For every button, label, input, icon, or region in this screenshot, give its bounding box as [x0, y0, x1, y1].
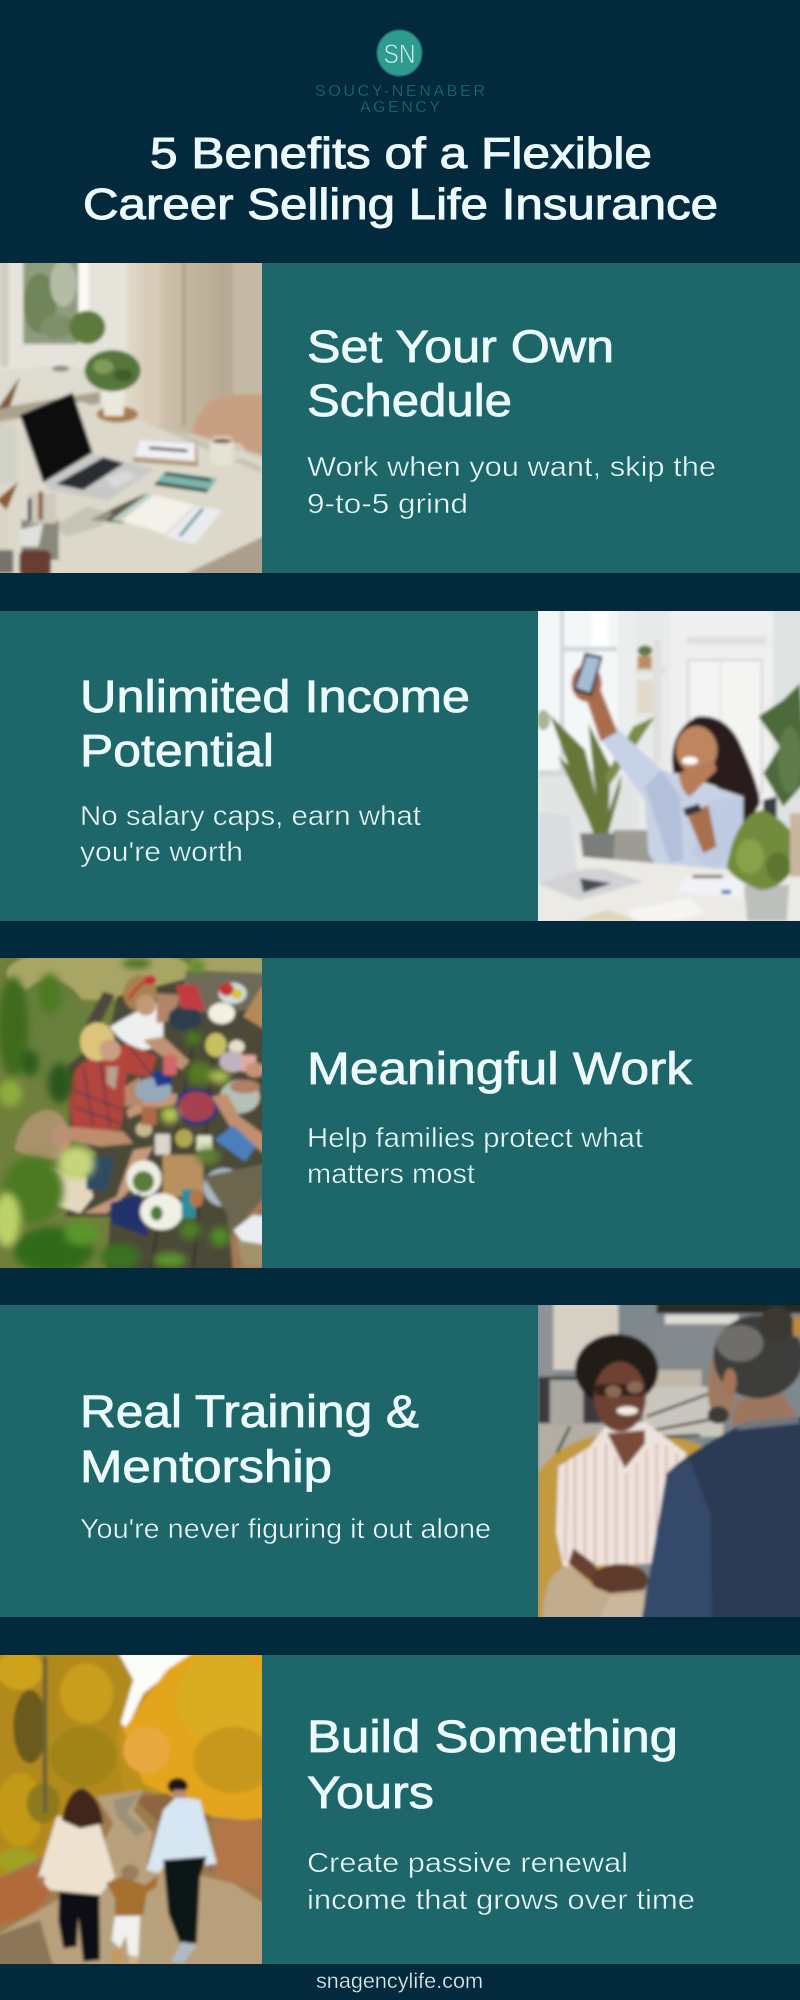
description: 9-to-5 grind: [307, 488, 468, 519]
heading: Real Training &: [80, 1386, 419, 1437]
logo: SN circle: SN: [384, 39, 416, 69]
photo: mentor conversation: [538, 1305, 800, 1617]
logo: SN circle: [377, 30, 422, 76]
heading: [80, 1386, 419, 1492]
header: [83, 30, 718, 229]
description: Create passive renewal: [307, 1847, 628, 1878]
title: 5 Benefits of a Flexible: [150, 129, 652, 178]
photo: family picnic from above: [0, 958, 262, 1268]
heading: [307, 321, 614, 426]
heading: Mentorship: [80, 1441, 332, 1492]
heading: Schedule: [307, 375, 512, 426]
description: No salary caps, earn what: [80, 800, 421, 831]
agency name: AGENCY: [360, 99, 440, 116]
heading: Unlimited Income: [80, 671, 470, 722]
heading: [80, 671, 470, 776]
footer website: snagencylife.com: [316, 1970, 483, 1993]
heading: Set Your Own: [307, 321, 614, 372]
description: [80, 800, 421, 867]
description: You're never figuring it out alone: [80, 1513, 491, 1544]
heading: Potential: [80, 725, 274, 776]
description: income that grows over time: [307, 1884, 695, 1915]
panel: unlimited income potential: [0, 593, 800, 933]
description: [307, 1122, 643, 1189]
panel: build something yours: [0, 1643, 800, 1983]
heading: Meaningful Work: [307, 1043, 693, 1094]
heading: Yours: [307, 1767, 434, 1818]
photo: family walking on autumn road: [0, 1655, 262, 1964]
description: [307, 451, 716, 519]
description: Help families protect what: [307, 1122, 643, 1153]
description: [307, 1847, 695, 1915]
description: matters most: [307, 1158, 475, 1189]
heading: Build Something: [307, 1711, 678, 1762]
description: you're worth: [80, 836, 243, 867]
agency name: SOUCY-NENABER: [315, 83, 485, 100]
description: Work when you want, skip the: [307, 451, 716, 482]
title: Career Selling Life Insurance: [83, 180, 718, 229]
heading: [307, 1711, 678, 1818]
panel: real training and mentorship: [0, 1293, 800, 1633]
panel: meaningful work: [0, 943, 800, 1283]
photo: home office desk: [0, 263, 262, 573]
agency name: [315, 83, 485, 116]
panel: set your own schedule: [0, 263, 800, 573]
title: [83, 129, 718, 229]
photo: woman celebrating with phone: [538, 611, 800, 921]
